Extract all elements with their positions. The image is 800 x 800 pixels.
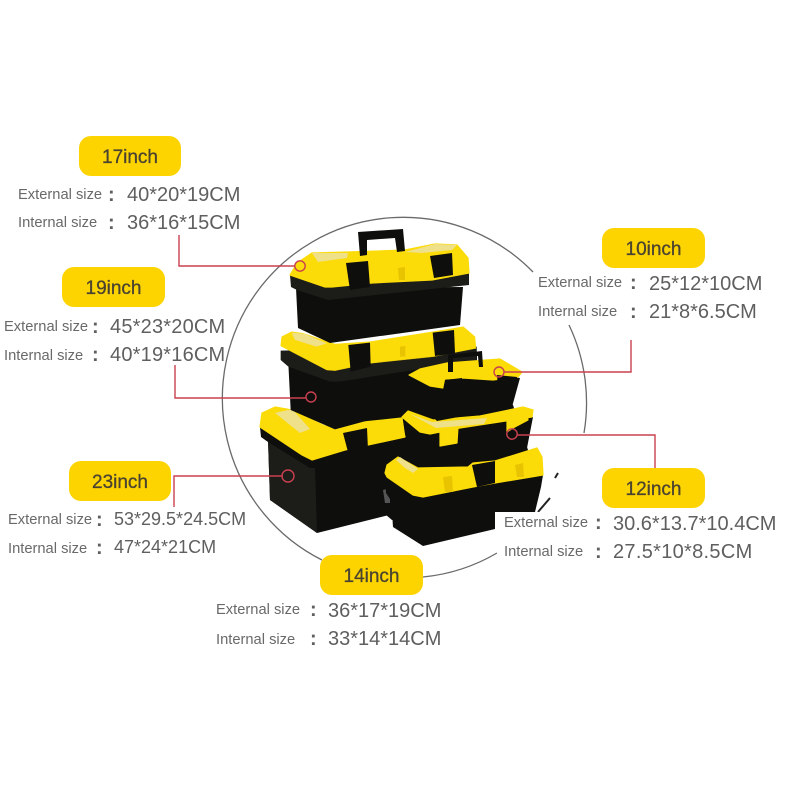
- connector: 17 inch: [179, 235, 305, 271]
- external size 12 inch: [504, 512, 776, 535]
- pill: 10inch: 10inch: [626, 239, 682, 260]
- size group: 23 inch: [8, 461, 246, 559]
- external size 17 inch: 40*20*19CM: [127, 184, 240, 206]
- external size 12 inch: External size: [504, 515, 588, 531]
- toolbox: 23 inch: [260, 407, 405, 533]
- internal size 23 inch: Internal size: [8, 541, 87, 557]
- internal size 10 inch: 21*8*6.5CM: [649, 301, 757, 323]
- internal size 19 inch: Internal size: [4, 348, 83, 364]
- toolbox: 19 inch: [281, 327, 477, 429]
- external size 10 inch: [538, 272, 762, 295]
- large circle outline behind the toolboxes: [222, 217, 587, 577]
- external size 23 inch: [8, 509, 246, 531]
- internal size 12 inch: 27.5*10*8.5CM: [613, 541, 753, 563]
- size group: 10 inch: [538, 228, 762, 323]
- internal size 23 inch: 47*24*21CM: [114, 537, 216, 557]
- internal size 23 inch: [8, 537, 216, 559]
- pill: 19inch: 19inch: [86, 278, 142, 299]
- external size 14 inch: :: [310, 599, 317, 621]
- pill: 17inch: [79, 136, 181, 176]
- size group: 19 inch: [4, 267, 225, 366]
- external size 17 inch: [18, 184, 240, 206]
- external size 10 inch: External size: [538, 275, 622, 291]
- internal size 19 inch: 40*19*16CM: [110, 344, 225, 366]
- pill: 12inch: [602, 468, 705, 508]
- pill: 14inch: [320, 555, 423, 595]
- internal size 10 inch: :: [630, 301, 637, 323]
- toolbox photo group: [260, 229, 543, 546]
- toolbox: 10 inch: [409, 351, 522, 421]
- pill: 14inch: 14inch: [344, 566, 400, 587]
- external size 19 inch: :: [92, 316, 99, 338]
- size group: 17 inch: [18, 136, 240, 234]
- internal size 14 inch: 33*14*14CM: [328, 628, 441, 650]
- internal size 14 inch: :: [310, 628, 317, 650]
- internal size 10 inch: Internal size: [538, 304, 617, 320]
- white backing behind 12 inch text: [497, 512, 782, 566]
- dark backing between stacked boxes: [353, 354, 528, 520]
- internal size 17 inch: Internal size: [18, 215, 97, 231]
- pill: 23inch: [69, 461, 171, 501]
- external size 10 inch: 25*12*10CM: [649, 273, 762, 295]
- size group: 12 inch: [504, 468, 776, 563]
- internal size 19 inch: :: [92, 344, 99, 366]
- pill: 10inch: [602, 228, 705, 268]
- external size 12 inch: 30.6*13.7*10.4CM: [613, 513, 776, 535]
- external size 19 inch: [4, 316, 225, 338]
- external size 17 inch: External size: [18, 187, 102, 203]
- external size 19 inch: External size: [4, 319, 88, 335]
- pill: 17inch: 17inch: [102, 147, 158, 168]
- external size 12 inch: :: [595, 512, 602, 534]
- toolbox: 17 inch: [290, 229, 469, 343]
- internal size 23 inch: :: [96, 537, 103, 559]
- internal size 19 inch: [4, 344, 225, 366]
- size group: 14 inch: [216, 555, 441, 650]
- internal size 17 inch: 36*16*15CM: [127, 212, 240, 234]
- pill: 12inch: 12inch: [626, 479, 682, 500]
- external size 23 inch: 53*29.5*24.5CM: [114, 509, 246, 529]
- internal size 12 inch: [504, 541, 753, 563]
- external size 14 inch: [216, 599, 441, 622]
- external size 10 inch: :: [630, 272, 637, 294]
- internal size 17 inch: [18, 212, 240, 234]
- internal size 17 inch: :: [108, 212, 115, 234]
- internal size 10 inch: [538, 301, 757, 323]
- external size 23 inch: :: [96, 509, 103, 531]
- connector: 23 inch: [174, 470, 294, 507]
- internal size 12 inch: :: [595, 541, 602, 563]
- external size 14 inch: 36*17*19CM: [328, 600, 441, 622]
- toolbox: 14 inch: [385, 448, 543, 546]
- connector: 12 inch: [507, 429, 655, 468]
- connector: 10 inch: [494, 340, 631, 377]
- external size 19 inch: 45*23*20CM: [110, 316, 225, 338]
- internal size 14 inch: Internal size: [216, 632, 295, 648]
- pill: 19inch: [62, 267, 165, 307]
- connector: 19 inch: [175, 365, 316, 402]
- internal size 14 inch: [216, 628, 441, 650]
- toolbox: 12 inch: [402, 407, 533, 465]
- external size 17 inch: :: [108, 184, 115, 206]
- external size 14 inch: External size: [216, 602, 300, 618]
- pill: 23inch: 23inch: [92, 472, 148, 493]
- internal size 12 inch: Internal size: [504, 544, 583, 560]
- external size 23 inch: External size: [8, 512, 92, 528]
